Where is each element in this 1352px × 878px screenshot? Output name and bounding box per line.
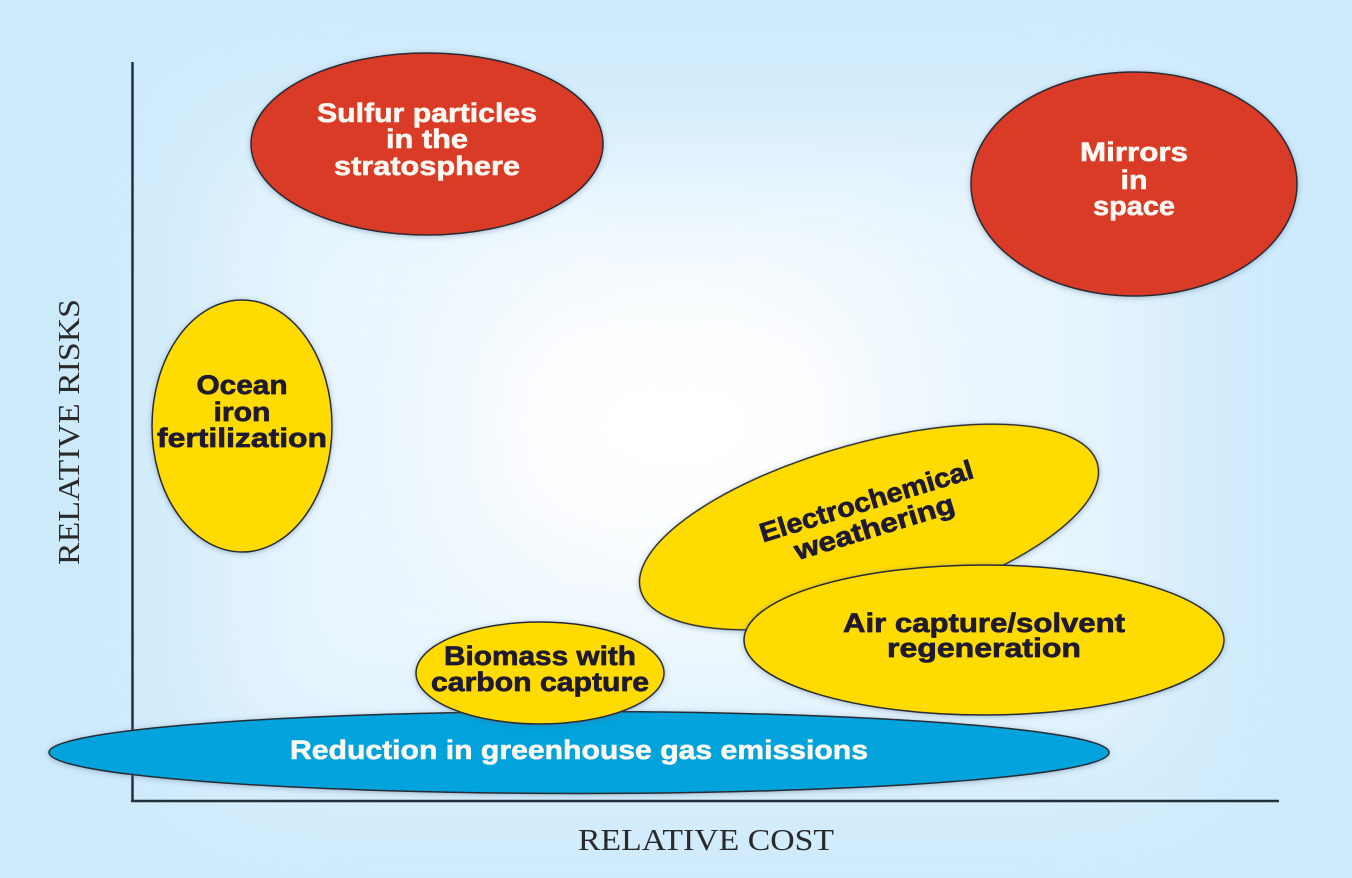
ellipse: sulfur particles in the stratosphere: Sulfur particles	[317, 98, 537, 128]
x-axis label: RELATIVE COST	[578, 822, 834, 857]
ellipse: ocean iron fertilization	[152, 300, 332, 552]
chart axes	[131, 62, 1279, 802]
ellipse: air capture / solvent regeneration: regeneration	[887, 633, 1081, 663]
ellipse: mirrors in space: Mirrors	[1080, 137, 1188, 167]
ellipse: air capture / solvent regeneration	[744, 565, 1224, 715]
ellipse: sulfur particles in the stratosphere: stratosphere	[334, 151, 520, 181]
ellipse: biomass with carbon capture	[416, 622, 664, 724]
ellipse: mirrors in space: space	[1093, 191, 1175, 221]
ellipse: biomass with carbon capture: Biomass with	[444, 641, 636, 671]
ellipse: biomass with carbon capture: carbon capture	[431, 667, 649, 697]
ellipse: sulfur particles in the stratosphere: in the	[386, 124, 468, 154]
ellipse: ocean iron fertilization: Ocean	[196, 370, 288, 400]
ellipse: reduction in greenhouse gas emissions	[49, 712, 1109, 794]
ellipse: mirrors in space	[971, 72, 1297, 296]
ellipse: sulfur particles in the stratosphere	[251, 53, 603, 235]
ellipse: electrochemical weathering: Electrochemical	[756, 455, 977, 548]
y-axis label: RELATIVE RISKS	[51, 299, 86, 565]
ellipse: electrochemical weathering	[618, 383, 1120, 671]
ellipse: ocean iron fertilization: iron	[214, 397, 270, 427]
ellipse: reduction in greenhouse gas emissions: Reduction in greenhouse gas emissions	[290, 735, 868, 765]
ellipse: air capture / solvent regeneration: Air capture/solvent	[843, 608, 1125, 638]
ellipse: ocean iron fertilization: fertilization	[157, 423, 327, 453]
ellipse: mirrors in space: in	[1120, 165, 1148, 195]
ellipse: electrochemical weathering: weathering	[789, 489, 958, 566]
